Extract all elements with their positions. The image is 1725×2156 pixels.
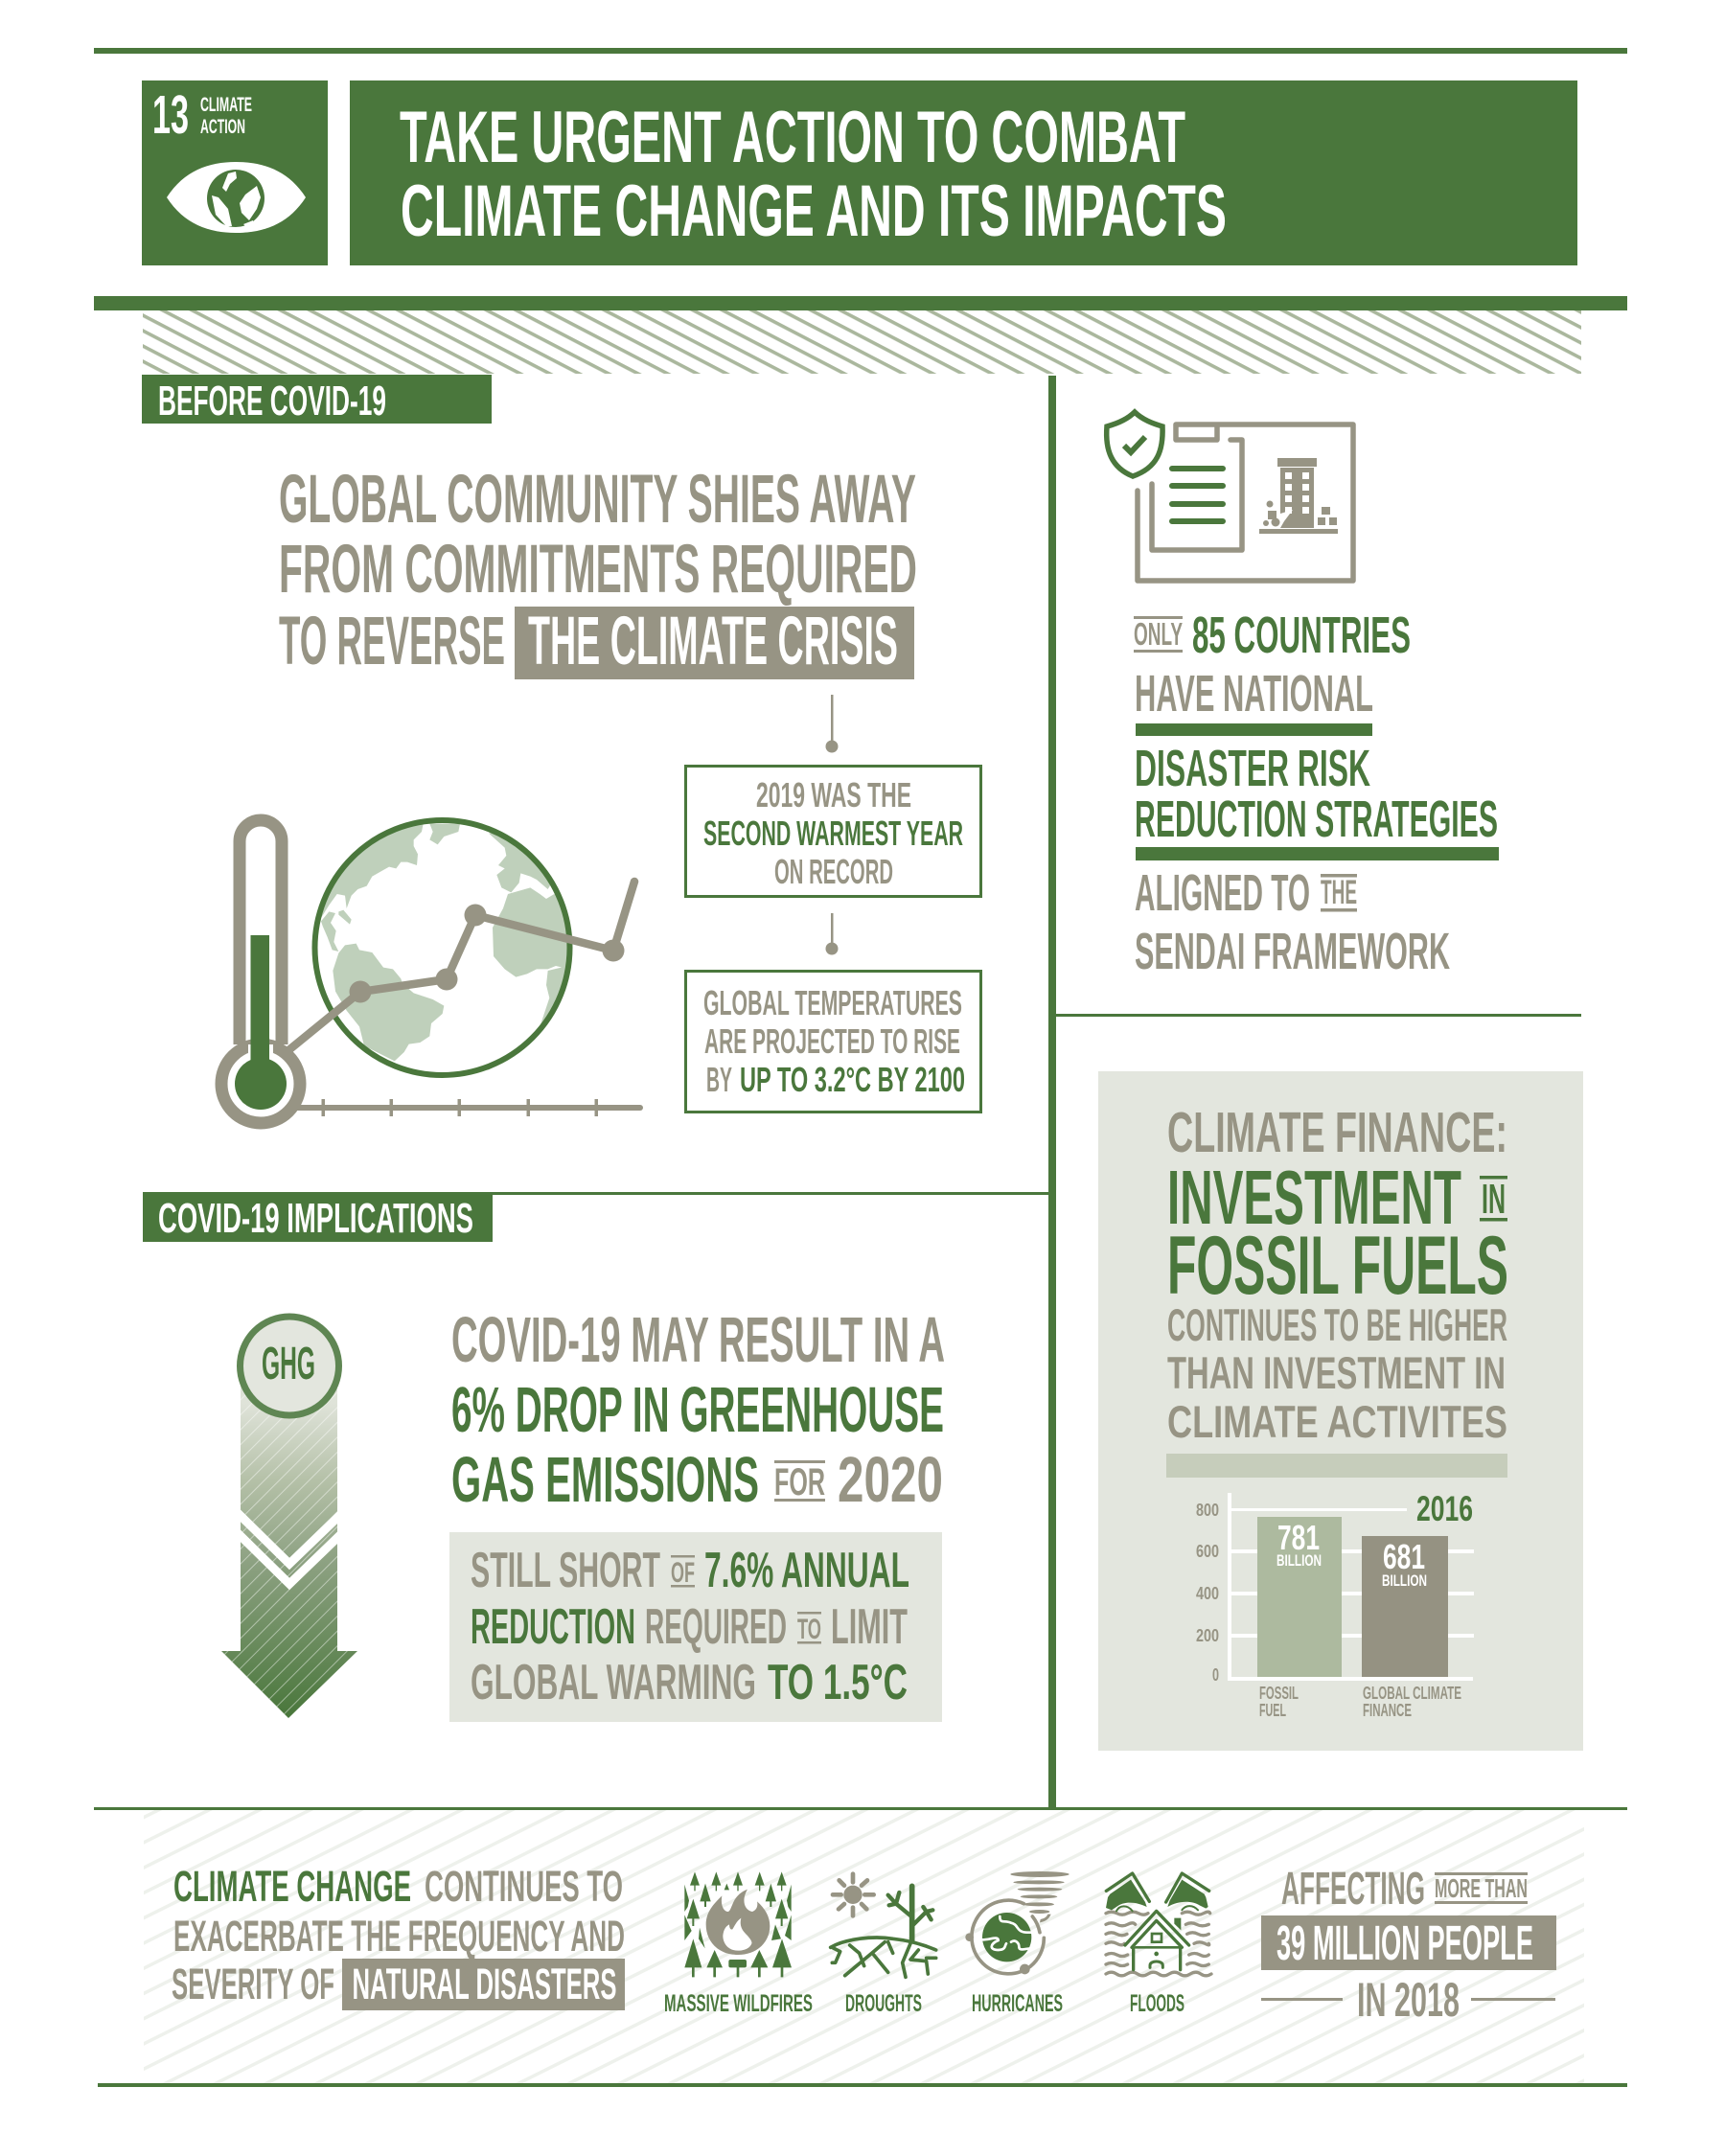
panel: still short: TO bbox=[797, 1614, 821, 1645]
bar: global climate finance bbox=[1362, 1536, 1448, 1677]
icon: massive wildfires bbox=[684, 1871, 792, 1977]
y axis labels bbox=[1196, 1501, 1219, 1685]
text: only 85 countries: 85 COUNTRIES bbox=[1192, 607, 1411, 664]
panel: still short: GLOBAL WARMING bbox=[471, 1655, 756, 1710]
goal name: CLIMATE bbox=[200, 94, 252, 116]
text: affecting 39 million: IN 2018 bbox=[1357, 1973, 1460, 2027]
text: only 85 countries: THE bbox=[1321, 874, 1357, 911]
hatch band bbox=[143, 310, 1581, 374]
thick rule bbox=[94, 296, 1627, 310]
icon: globe bbox=[307, 813, 582, 1075]
y axis labels: 800 bbox=[1196, 1501, 1219, 1520]
connector 2 bbox=[826, 913, 838, 954]
panel: still short: REQUIRED bbox=[645, 1599, 787, 1655]
connector 1 bbox=[826, 695, 838, 753]
panel: climate finance bbox=[1098, 1071, 1583, 1751]
label: floods: FLOODS bbox=[1130, 1990, 1184, 2017]
heading: covid drop: 6% DROP IN GREENHOUSE bbox=[451, 1374, 944, 1446]
panel: still short bbox=[449, 1532, 942, 1722]
text: affecting 39 million: AFFECTING bbox=[1281, 1864, 1425, 1915]
text: natural disasters: SEVERITY OF bbox=[172, 1960, 334, 2008]
text: natural disasters: EXACERBATE THE FREQUENCY AND bbox=[173, 1912, 625, 1961]
text: affecting 39 million: MORE THAN bbox=[1435, 1873, 1528, 1903]
heading: climate finance bbox=[1167, 1101, 1508, 1447]
heading: climate finance: THAN INVESTMENT IN bbox=[1167, 1347, 1506, 1398]
y axis labels: 600 bbox=[1196, 1542, 1219, 1561]
icon: eye with globe bbox=[167, 162, 306, 233]
top rule bbox=[94, 48, 1627, 54]
y axis labels: 200 bbox=[1196, 1626, 1219, 1645]
goal number: 13 bbox=[152, 84, 189, 146]
text: only 85 countries: HAVE NATIONAL bbox=[1135, 665, 1373, 722]
callout: projected rise: GLOBAL TEMPERATURES bbox=[703, 983, 962, 1022]
heading: global community: GLOBAL COMMUNITY SHIES AWAY bbox=[279, 462, 916, 538]
heading: global community bbox=[279, 462, 917, 679]
callout: projected rise: UP TO 3.2°C BY 2100 bbox=[740, 1060, 965, 1099]
text: natural disasters: CONTINUES TO bbox=[425, 1862, 623, 1911]
title: TAKE URGENT ACTION TO COMBAT bbox=[400, 97, 1185, 178]
text: natural disasters bbox=[172, 1862, 625, 2010]
chart axis bbox=[292, 1099, 643, 1116]
icon: droughts bbox=[831, 1874, 936, 1977]
title bbox=[400, 97, 1227, 252]
bottom end rule bbox=[98, 2083, 1627, 2087]
heading: climate finance: INVESTMENT bbox=[1167, 1155, 1461, 1240]
heading: global community: THE CLIMATE CRISIS bbox=[528, 604, 898, 679]
heading: climate finance: CLIMATE FINANCE: bbox=[1167, 1101, 1507, 1164]
text: natural disasters: CLIMATE CHANGE bbox=[173, 1862, 411, 1911]
callout: 2019 second warmest: ON RECORD bbox=[774, 852, 893, 891]
text: only 85 countries: SENDAI FRAMEWORK bbox=[1135, 923, 1450, 980]
title banner bbox=[350, 80, 1577, 265]
x axis labels: FINANCE bbox=[1363, 1701, 1412, 1720]
icon: document and damaged building bbox=[1107, 412, 1353, 581]
heading: climate finance: IN bbox=[1482, 1176, 1506, 1223]
label: droughts: DROUGHTS bbox=[845, 1990, 922, 2017]
icon: shield bbox=[1107, 412, 1162, 476]
section tag: covid-19 implications bbox=[143, 1192, 493, 1242]
y axis labels: 400 bbox=[1196, 1584, 1219, 1603]
bar: global climate finance: 681 bbox=[1383, 1537, 1425, 1576]
icon: GHG down arrow bbox=[221, 1317, 357, 1718]
section tag: before covid-19: BEFORE COVID-19 bbox=[158, 378, 386, 424]
x axis labels bbox=[1259, 1684, 1461, 1720]
decorative bar bbox=[1166, 1454, 1507, 1478]
text: natural disasters: NATURAL DISASTERS bbox=[353, 1960, 617, 2008]
goal name bbox=[200, 94, 252, 138]
bar: global climate finance: BILLION bbox=[1382, 1571, 1427, 1590]
panel: still short: REDUCTION bbox=[471, 1599, 635, 1655]
icon: hurricanes bbox=[965, 1871, 1070, 1974]
callout: 2019 second warmest: SECOND WARMEST YEAR bbox=[703, 814, 963, 853]
callout: projected rise: BY bbox=[706, 1060, 732, 1099]
heading: global community: TO REVERSE bbox=[279, 604, 505, 679]
SDG 13 badge bbox=[142, 80, 328, 265]
x axis labels: FOSSIL bbox=[1259, 1684, 1299, 1703]
heading: global community: FROM COMMITMENTS REQUIRED bbox=[279, 532, 917, 608]
heading: covid drop bbox=[451, 1304, 945, 1516]
icon: floods bbox=[1106, 1873, 1211, 1976]
title: CLIMATE CHANGE AND ITS IMPACTS bbox=[401, 171, 1227, 252]
bar: fossil fuel: 781 bbox=[1277, 1518, 1320, 1557]
bar chart bbox=[1196, 1489, 1474, 1720]
heading: covid drop: FOR bbox=[774, 1461, 825, 1503]
callout: 2019 second warmest bbox=[686, 767, 981, 897]
text: only 85 countries bbox=[1134, 607, 1499, 980]
icon: line chart bbox=[288, 882, 634, 1051]
heading: covid drop: GAS EMISSIONS bbox=[451, 1444, 759, 1516]
bottom band hatch bbox=[144, 1809, 1584, 2083]
year label: 2016 bbox=[1416, 1489, 1473, 1528]
heading: covid drop: 2020 bbox=[838, 1444, 943, 1516]
x axis labels: FUEL bbox=[1259, 1701, 1286, 1720]
bar: fossil fuel bbox=[1257, 1517, 1342, 1677]
label: hurricanes: HURRICANES bbox=[972, 1990, 1063, 2017]
divider right horizontal bbox=[1056, 1014, 1581, 1017]
divider left horizontal bbox=[143, 1192, 1048, 1195]
bar: fossil fuel: BILLION bbox=[1276, 1551, 1322, 1570]
text: only 85 countries: ALIGNED TO bbox=[1135, 864, 1310, 922]
goal name: ACTION bbox=[200, 116, 245, 138]
panel: still short: 7.6% ANNUAL bbox=[704, 1543, 909, 1598]
x axis labels: GLOBAL CLIMATE bbox=[1363, 1684, 1461, 1703]
label: massive wildfires: MASSIVE WILDFIRES bbox=[664, 1990, 813, 2017]
y axis labels: 0 bbox=[1212, 1665, 1219, 1685]
icon: GHG down arrow: GHG bbox=[262, 1339, 315, 1389]
icon: building bbox=[1259, 458, 1338, 534]
section tag: covid-19 implications: COVID-19 IMPLICATIONS bbox=[158, 1195, 473, 1242]
panel: still short: TO 1.5°C bbox=[768, 1655, 908, 1710]
panel: still short: STILL SHORT bbox=[471, 1543, 660, 1598]
icon: thermometer bbox=[221, 820, 300, 1123]
heading: climate finance: CLIMATE ACTIVITES bbox=[1167, 1396, 1507, 1447]
callout: projected rise bbox=[686, 972, 981, 1112]
text: only 85 countries: DISASTER RISK bbox=[1135, 740, 1370, 797]
callout: 2019 second warmest: 2019 WAS THE bbox=[756, 775, 911, 814]
main divider vertical bbox=[1048, 376, 1056, 1808]
panel: still short: OF bbox=[671, 1557, 695, 1589]
bottom top rule bbox=[94, 1807, 1627, 1810]
text: only 85 countries: ONLY bbox=[1134, 616, 1183, 652]
callout: projected rise: ARE PROJECTED TO RISE bbox=[704, 1021, 960, 1061]
panel: still short: LIMIT bbox=[831, 1599, 908, 1655]
heading: covid drop: COVID-19 MAY RESULT IN A bbox=[451, 1304, 945, 1376]
text: affecting 39 million bbox=[1261, 1864, 1556, 2027]
